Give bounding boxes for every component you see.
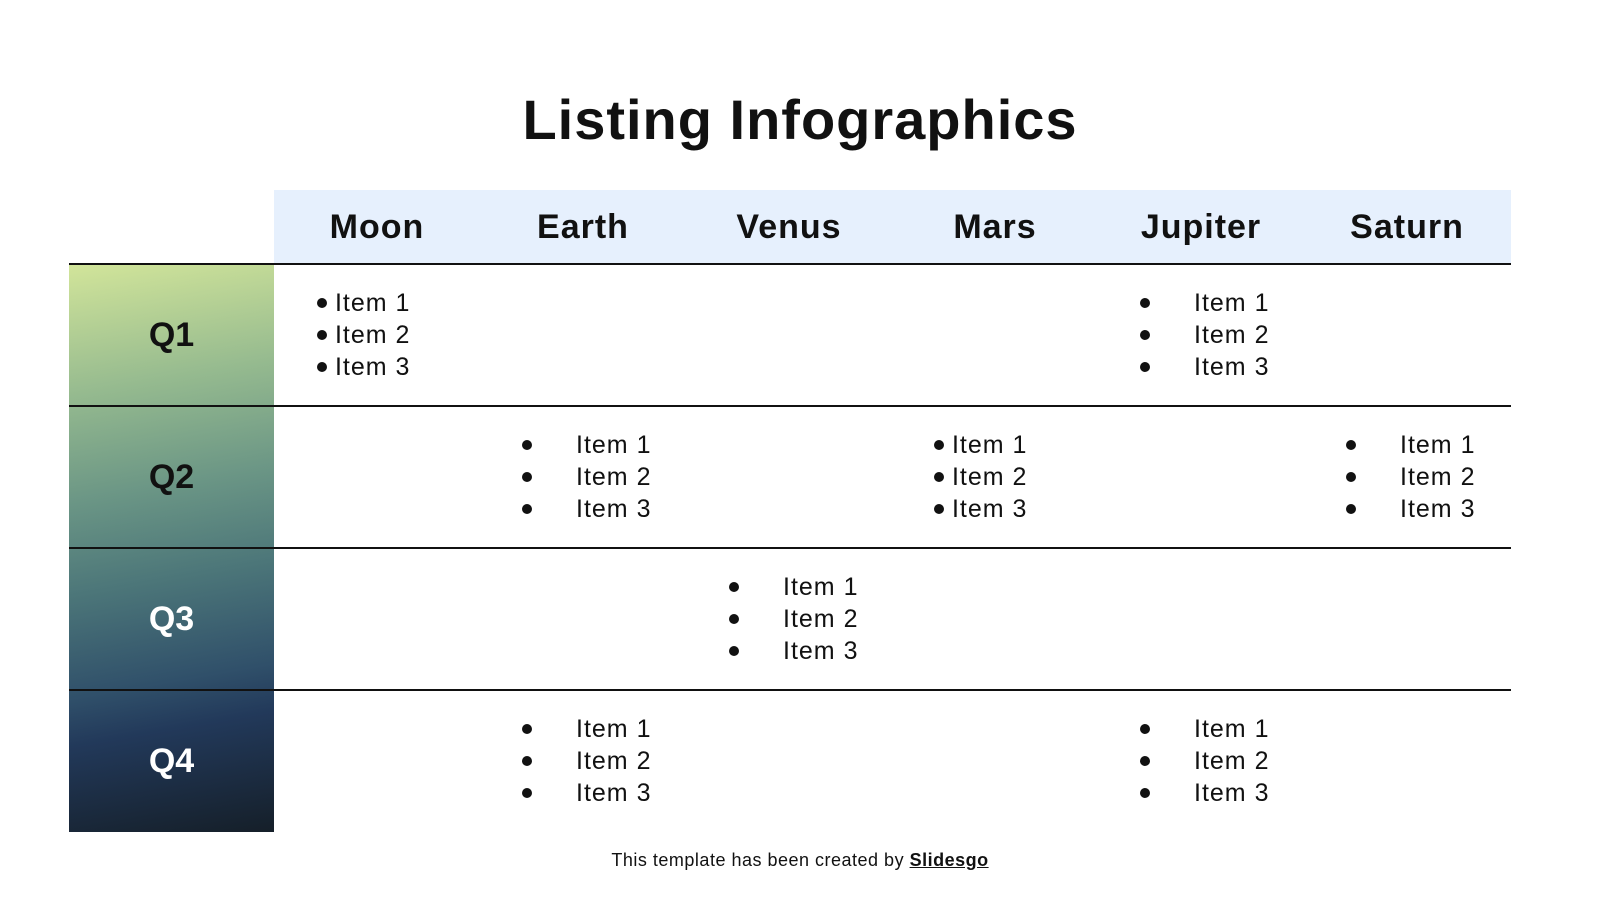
list: Q2 Earth: Item 1 <box>576 431 651 459</box>
list: Q2 Saturn: Item 3 <box>1400 495 1475 523</box>
list: Q3 Venus <box>729 573 858 665</box>
header: Earth: Earth <box>537 208 629 246</box>
list: Q4 Earth: Item 3 <box>576 779 651 807</box>
list: Q1 Moon: Item 1 <box>335 289 410 317</box>
list: Q2 Saturn: Item 2 <box>1400 463 1475 491</box>
row label column <box>69 264 274 832</box>
list: Q2 Saturn <box>1346 431 1475 523</box>
header: Saturn: Saturn <box>1350 208 1464 246</box>
footer credit: This template has been created by Slidesgo <box>611 850 989 870</box>
row label: Q2: Q2 <box>149 458 194 496</box>
list: Q3 Venus: Item 3 <box>783 637 858 665</box>
list: Q2 Mars <box>934 431 1027 523</box>
list: Q4 Earth: Item 2 <box>576 747 651 775</box>
list: Q3 Venus: Item 1 <box>783 573 858 601</box>
list: Q4 Jupiter: Item 3 <box>1194 779 1269 807</box>
list: Q1 Jupiter: Item 3 <box>1194 353 1269 381</box>
list: Q2 Earth: Item 3 <box>576 495 651 523</box>
list: Q1 Jupiter: Item 1 <box>1194 289 1269 317</box>
header: Mars: Mars <box>953 208 1037 246</box>
list: Q1 Moon: Item 3 <box>335 353 410 381</box>
title: Listing Infographics <box>522 88 1078 151</box>
list: Q4 Jupiter: Item 1 <box>1194 715 1269 743</box>
row label: Q1: Q1 <box>149 316 194 354</box>
row label: Q4: Q4 <box>149 742 194 780</box>
list: Q2 Mars: Item 2 <box>952 463 1027 491</box>
list: Q2 Earth <box>522 431 651 523</box>
list: Q1 Moon <box>317 289 410 381</box>
list: Q4 Jupiter: Item 2 <box>1194 747 1269 775</box>
header band <box>274 190 1511 264</box>
list: Q2 Earth: Item 2 <box>576 463 651 491</box>
list: Q1 Moon: Item 2 <box>335 321 410 349</box>
header: Moon: Moon <box>330 208 424 246</box>
list: Q4 Earth: Item 1 <box>576 715 651 743</box>
header: Venus: Venus <box>736 208 842 246</box>
list: Q2 Mars: Item 1 <box>952 431 1027 459</box>
list: Q1 Jupiter: Item 2 <box>1194 321 1269 349</box>
header: Jupiter: Jupiter <box>1141 208 1261 246</box>
row label: Q3: Q3 <box>149 600 194 638</box>
list: Q4 Earth <box>522 715 651 807</box>
list: Q3 Venus: Item 2 <box>783 605 858 633</box>
list: Q4 Jupiter <box>1140 715 1269 807</box>
list: Q1 Jupiter <box>1140 289 1269 381</box>
list: Q2 Saturn: Item 1 <box>1400 431 1475 459</box>
list: Q2 Mars: Item 3 <box>952 495 1027 523</box>
